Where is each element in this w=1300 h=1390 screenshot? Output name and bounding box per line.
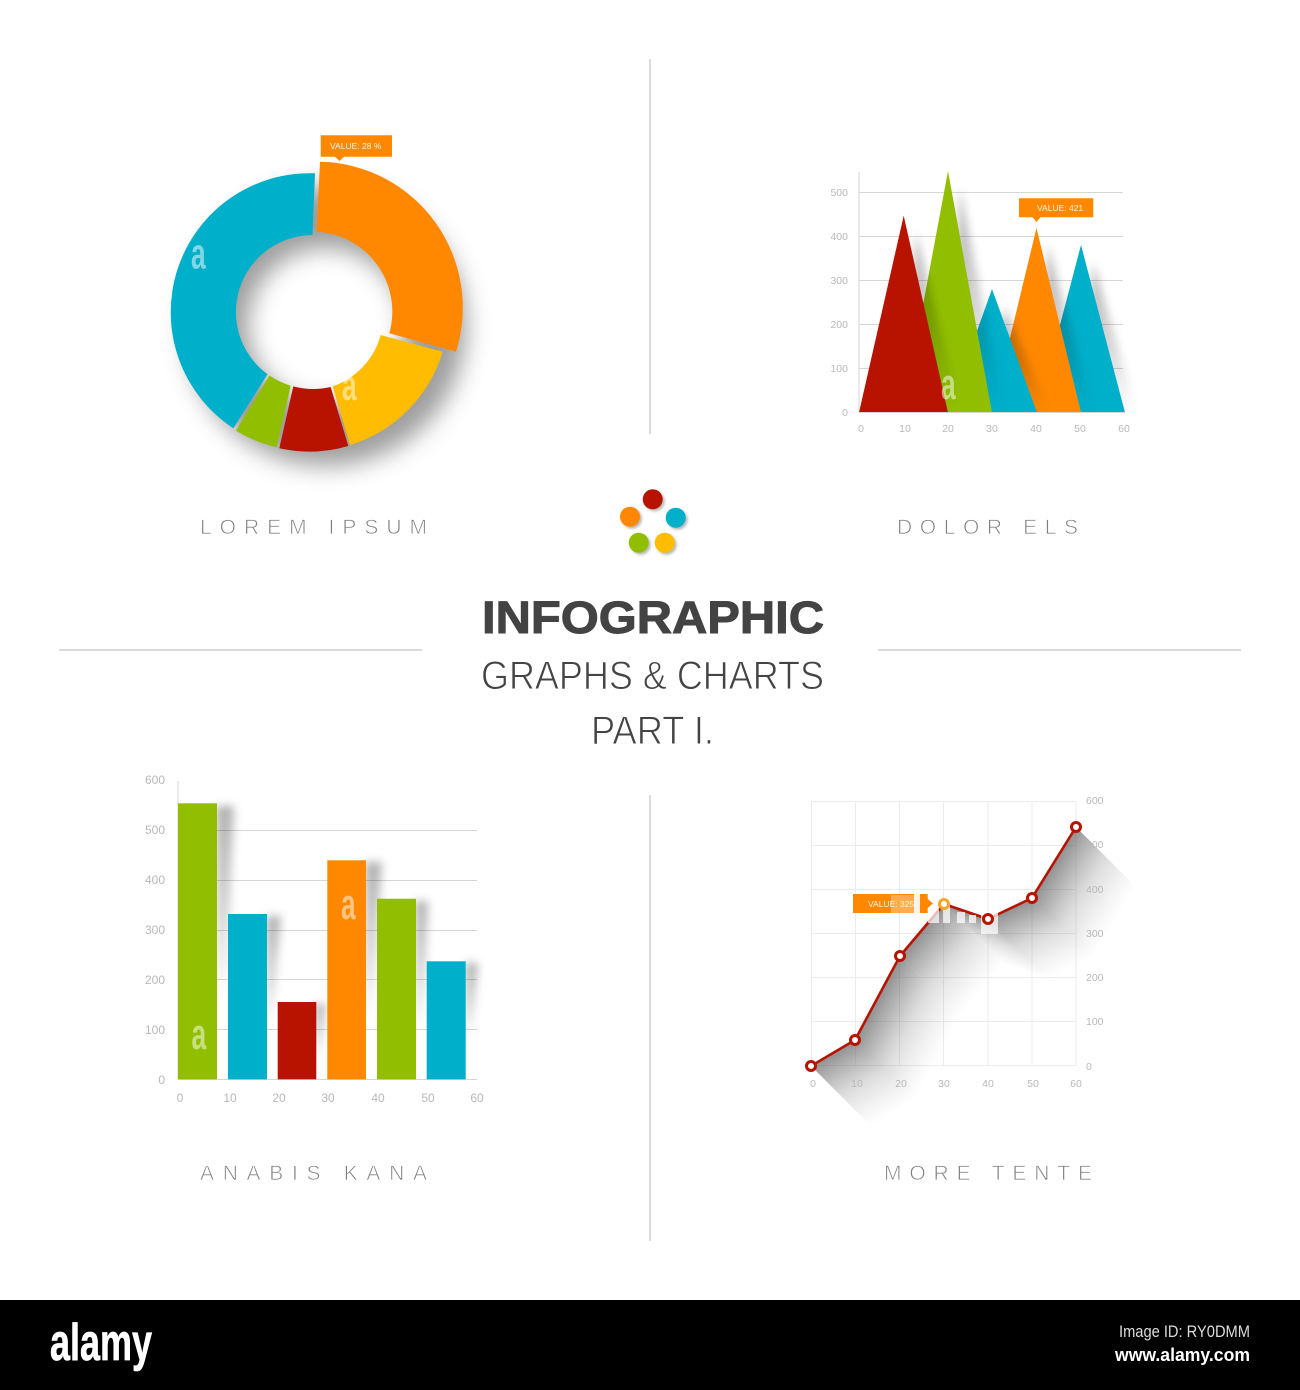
x axis labels: 10 [223, 1091, 237, 1105]
y axis labels: 500 [145, 823, 165, 837]
y axis labels: 400 [1086, 884, 1104, 896]
bar: 30-40 orange [327, 860, 366, 1079]
bar: 20-30 red [278, 1002, 316, 1079]
caption: more tente: MORE TENTE [884, 1162, 1092, 1185]
x axis labels: 40 [371, 1091, 385, 1105]
y axis labels [145, 773, 165, 1087]
panel: donut chart: a [342, 360, 357, 410]
x axis labels: 0 [858, 423, 864, 435]
x axis labels [810, 1078, 1082, 1090]
panel: triangle chart: a [941, 359, 956, 409]
triangle: red 10 [859, 216, 948, 412]
x axis labels [858, 423, 1130, 435]
title block [481, 592, 824, 753]
y axis labels: 0 [842, 407, 848, 419]
caption: anabis kana: ANABIS KANA [200, 1162, 427, 1185]
footer logo: alamy [50, 1314, 152, 1372]
panel: donut chart [171, 135, 463, 452]
donut segment: orange exploded [317, 162, 463, 352]
tooltip: value 325 [853, 894, 933, 913]
y axis labels: 200 [1086, 972, 1104, 984]
tooltip: value 421: VALUE: 421 [1037, 203, 1083, 213]
logo: five dots [620, 489, 688, 555]
caption: lorem ipsum: LOREM IPSUM [200, 516, 427, 539]
y axis labels: 0 [1086, 1061, 1092, 1073]
y axis labels: 200 [830, 319, 848, 331]
y axis labels: 300 [1086, 928, 1104, 940]
tooltip: value 421 [1019, 198, 1093, 222]
long shadow under line [811, 827, 1136, 1126]
data points [806, 822, 1080, 1070]
y axis labels: 600 [145, 773, 165, 787]
y axis labels: 300 [830, 275, 848, 287]
y axis labels [830, 187, 848, 419]
y axis labels: 400 [830, 231, 848, 243]
x axis labels: 20 [942, 423, 954, 435]
x axis labels: 30 [321, 1091, 335, 1105]
heading: infographic: INFOGRAPHIC [482, 592, 824, 643]
data line [811, 827, 1076, 1066]
y axis labels [1086, 795, 1104, 1073]
triangle: blue 50 [1060, 245, 1125, 412]
subheading: part I: PART I. [591, 709, 714, 753]
x axis labels: 50 [421, 1091, 435, 1105]
caption: dolor els: DOLOR ELS [897, 516, 1078, 539]
x axis labels: 50 [1074, 423, 1086, 435]
footer url: www.alamy.com [1114, 1345, 1250, 1365]
panel: line chart [806, 795, 1136, 1126]
footer bar [0, 1300, 1300, 1390]
x axis labels: 10 [899, 423, 911, 435]
panel: donut chart: a [191, 228, 206, 278]
x axis labels: 0 [177, 1091, 184, 1105]
x axis labels: 50 [1027, 1078, 1039, 1090]
y axis labels: 0 [158, 1073, 165, 1087]
tooltip: value 325: VALUE: 325 [868, 899, 914, 909]
y axis labels: 100 [145, 1023, 165, 1037]
y axis labels: 400 [145, 873, 165, 887]
footer image id: Image ID: RY0DMM [1119, 1323, 1250, 1341]
y axis labels: 300 [145, 923, 165, 937]
triangle: green 20 [923, 171, 992, 412]
x axis labels: 40 [1030, 423, 1042, 435]
y axis labels: 500 [1086, 839, 1104, 851]
panel: bar chart [145, 773, 484, 1105]
y axis labels: 500 [830, 187, 848, 199]
panel: bar chart: a [192, 1009, 207, 1059]
y axis labels: 600 [1086, 795, 1104, 807]
subheading: graphs and charts: GRAPHS & CHARTS [481, 654, 824, 698]
panel: triangle chart [830, 171, 1137, 435]
x axis labels: 20 [895, 1078, 907, 1090]
triangle: orange 40 [1010, 228, 1081, 412]
x axis labels: 30 [986, 423, 998, 435]
triangle: blue 30 [977, 289, 1037, 412]
x axis labels: 0 [810, 1078, 816, 1090]
donut segment: red [279, 386, 348, 452]
x axis labels: 60 [1118, 423, 1130, 435]
bar: 40-50 green [377, 899, 416, 1079]
x axis labels [177, 1091, 484, 1105]
y axis labels: 100 [1086, 1016, 1104, 1028]
bar: 50-60 blue [427, 961, 466, 1079]
x axis labels: 40 [982, 1078, 994, 1090]
x axis labels: 60 [470, 1091, 484, 1105]
donut segment: green [236, 376, 291, 447]
bar: 0-10 green [178, 803, 217, 1079]
tooltip: value 28 %: VALUE: 28 % [330, 141, 382, 151]
x axis labels: 30 [938, 1078, 950, 1090]
y axis labels: 100 [830, 363, 848, 375]
x axis labels: 20 [272, 1091, 286, 1105]
x axis labels: 10 [851, 1078, 863, 1090]
tooltip: value 28 % [321, 135, 392, 161]
donut segment: blue [171, 173, 315, 428]
x axis labels: 60 [1070, 1078, 1082, 1090]
bar: 10-20 blue [228, 914, 267, 1079]
panel: bar chart: a [341, 879, 356, 929]
y axis labels: 200 [145, 973, 165, 987]
donut segment: yellow [333, 335, 443, 445]
